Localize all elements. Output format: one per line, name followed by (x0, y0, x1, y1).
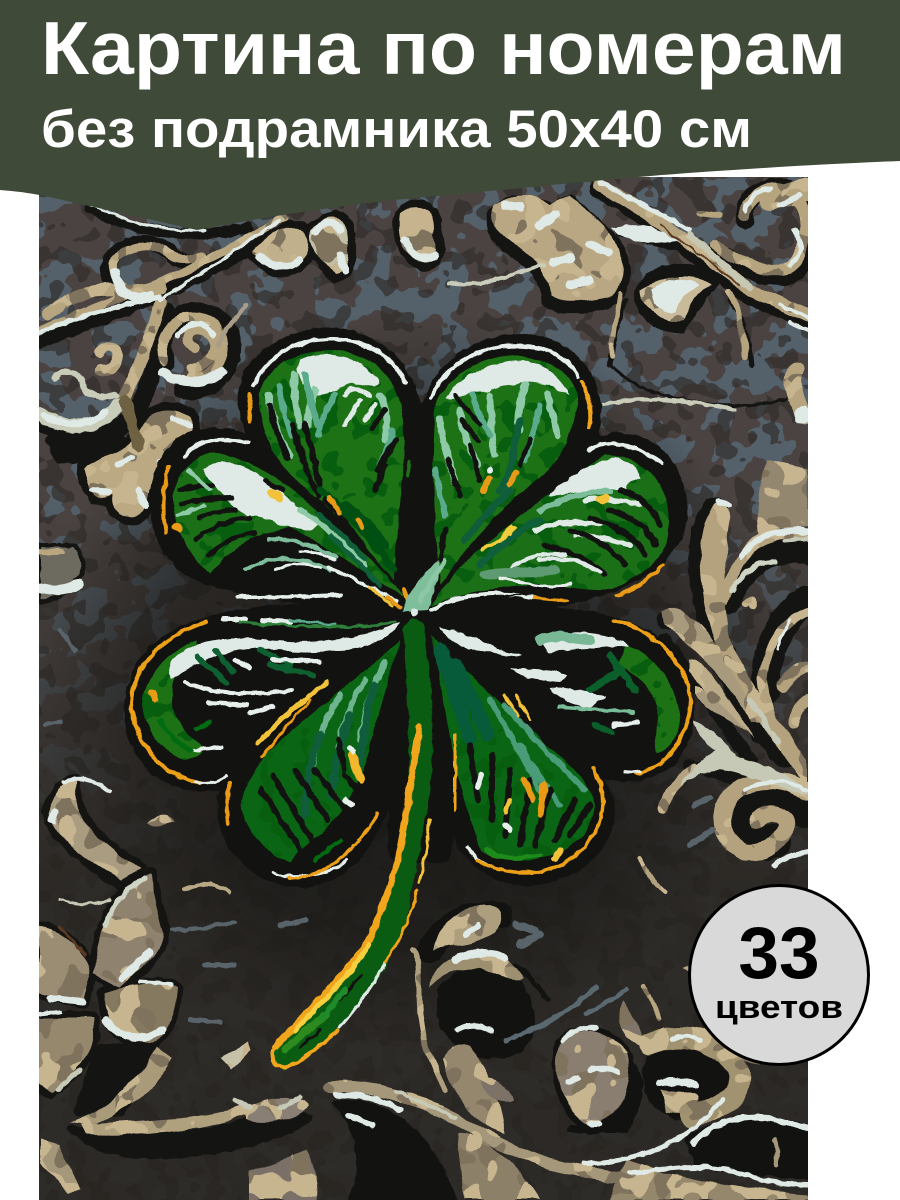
header band (0, 0, 900, 230)
title: Картина по номерам (41, 6, 846, 90)
badge label: цветов (715, 989, 843, 1025)
petal: middle left (131, 619, 400, 783)
ornament: bottom centre scrolls (330, 905, 640, 1200)
clover black shadow silhouette (136, 340, 683, 875)
ornament: bottom left leaves (38, 779, 318, 1200)
petal: lower right (432, 635, 603, 873)
ornament: left edge pieces (39, 545, 82, 725)
petal: top right (431, 346, 590, 585)
painting (38, 177, 811, 1200)
ornament: top left scrolls (39, 204, 290, 462)
petal: lower left (227, 640, 400, 878)
ornament: top right flower and scrolls (450, 182, 811, 424)
ornament: bottom right flower (557, 964, 808, 1200)
clover (131, 339, 691, 1070)
ornament: top flowers (253, 205, 439, 278)
painted background (39, 177, 808, 1200)
ornament: right acanthus (640, 460, 808, 893)
petal: middle right (438, 620, 691, 773)
petal: upper left (164, 439, 410, 607)
stem (272, 619, 432, 1070)
badge number: 33 (738, 913, 820, 994)
badge: colour count (690, 886, 868, 1064)
ornaments (38, 182, 811, 1200)
petal: centre highlights (240, 560, 445, 627)
petal: upper right (431, 444, 669, 610)
ornament: left flower (84, 400, 192, 517)
petal: top left (249, 339, 410, 580)
subtitle: без подрамника 50х40 см (41, 100, 752, 159)
